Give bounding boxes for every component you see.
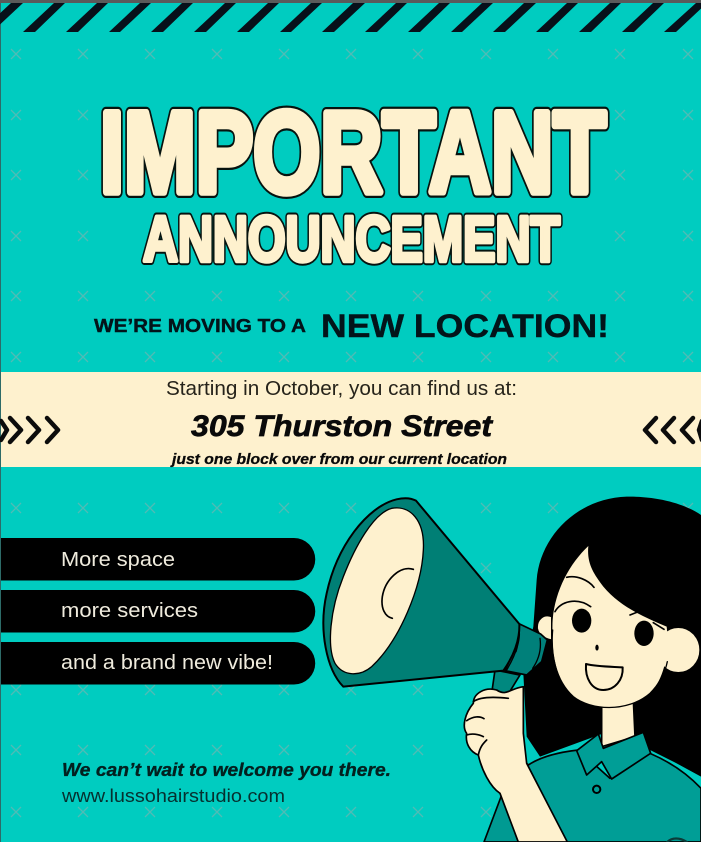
megaphone neck [505, 623, 547, 675]
pill: brand new vibe [1, 642, 315, 684]
megaphone inner curve [382, 569, 413, 618]
megaphone cone [323, 498, 519, 687]
title: ANNOUNCEMENT: ANNOUNCEMENT [143, 203, 560, 275]
benefit pills [1, 538, 315, 684]
right ear [657, 627, 700, 673]
pill: more space [1, 538, 315, 580]
pill: more space: More space [61, 549, 175, 571]
pill: brand new vibe: and a brand new vibe! [61, 652, 273, 674]
title: ANNOUNCEMENT: ANNOUNCEMENT [143, 203, 560, 275]
megaphone handle [492, 670, 520, 697]
pill: more services: more services [61, 600, 198, 622]
eyes [572, 609, 654, 651]
hair [523, 497, 701, 777]
shirt button [593, 786, 600, 793]
banner [1, 372, 701, 468]
arm and hand [464, 687, 567, 842]
pocket edge [667, 838, 687, 842]
mouth [586, 664, 623, 690]
left chevrons [1, 418, 58, 442]
website: www.lussohairstudio.com [61, 786, 285, 806]
subheading [94, 308, 609, 344]
banner line: one block over: just one block over from our current location [170, 451, 507, 468]
neck [602, 700, 635, 747]
finger lines [467, 697, 508, 755]
closing message: We can’t wait to welcome you there. [62, 760, 391, 780]
shirt [527, 750, 701, 842]
banner line: starting in October: Starting in October, you can find us at: [166, 378, 517, 400]
illustration: woman with megaphone [323, 497, 701, 842]
collar [577, 732, 651, 779]
eyebrows [555, 577, 664, 629]
subheading: NEW LOCATION! [321, 308, 609, 344]
hazard stripes [0, 3, 701, 32]
pill: more services [1, 590, 315, 632]
megaphone opening [330, 508, 423, 674]
banner line: address: 305 Thurston Street [191, 410, 494, 443]
left ear [537, 616, 552, 640]
face [552, 546, 668, 707]
subheading: WE’RE MOVING TO A [94, 315, 306, 336]
right chevrons [645, 418, 701, 442]
left sleeve [484, 795, 518, 842]
